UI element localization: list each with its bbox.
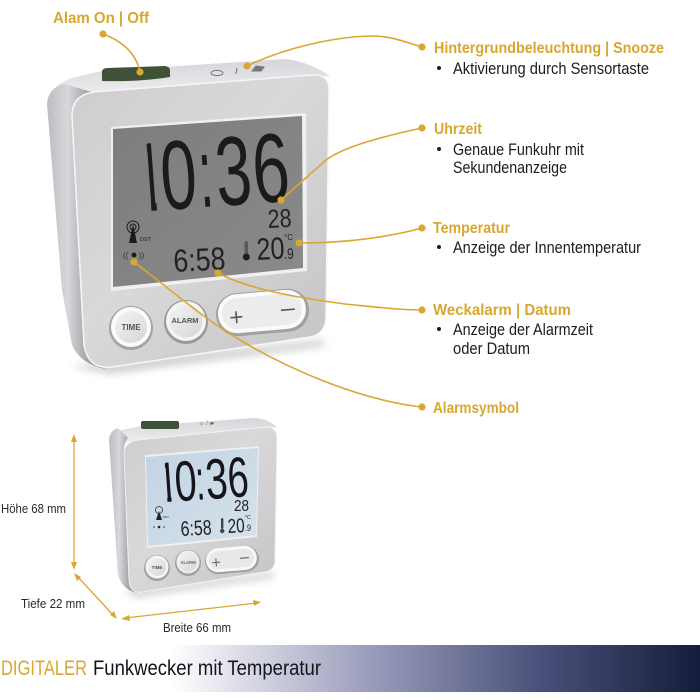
ALARM button: ALARM xyxy=(171,316,199,325)
plus minus button xyxy=(214,287,311,338)
time 10:36 xyxy=(146,134,288,211)
label: width: Breite 66 mm xyxy=(163,620,231,635)
clock side xyxy=(47,84,106,369)
callout line: alarm date xyxy=(214,269,426,314)
small LCD xyxy=(145,445,259,548)
large clock xyxy=(47,59,330,374)
block: temperature: Temperatur xyxy=(433,220,510,237)
small ALARM button xyxy=(175,550,201,576)
label: height: Höhe 68 mm xyxy=(1,501,66,516)
clock top surface xyxy=(52,59,330,95)
block: time: Sekundenanzeige xyxy=(453,159,567,177)
arrow: height xyxy=(71,434,77,570)
small clock side xyxy=(109,428,138,593)
block: temperature: Anzeige der Innentemperatur xyxy=(453,239,641,257)
alarm symbol: (( xyxy=(123,251,129,260)
footer band xyxy=(1,645,700,692)
thermometer icon xyxy=(243,241,250,260)
small alarm switch xyxy=(141,421,179,429)
small temperature: °C xyxy=(245,515,251,521)
small time: 1 xyxy=(155,450,180,516)
small time: : xyxy=(193,448,207,513)
callout line: alarm symbol xyxy=(130,258,426,411)
small thermometer xyxy=(220,518,224,533)
small TIME button: TIME xyxy=(152,565,162,570)
block: time: Uhrzeit xyxy=(434,121,482,138)
block: temperature xyxy=(433,220,641,257)
antenna icon DST xyxy=(127,221,152,243)
footer title: DIGITALER xyxy=(1,657,87,680)
callout line: temperature xyxy=(295,224,426,247)
TIME button xyxy=(109,306,153,350)
temperature 20.9: 20 xyxy=(256,231,285,267)
alarm switch xyxy=(102,66,170,81)
antenna icon DST: DST xyxy=(140,237,152,243)
footer title xyxy=(1,657,321,680)
small top icons: ☼ / ▰ xyxy=(199,421,214,427)
TIME button: TIME xyxy=(121,323,141,332)
callout line: backlight snooze xyxy=(243,36,426,70)
small alarm time: 6:58 xyxy=(180,516,212,541)
small seconds: 28 xyxy=(234,498,249,515)
time 10:36: 0 xyxy=(156,119,200,231)
block: alarm date: Weckalarm | Datum xyxy=(433,302,571,319)
arrow: depth xyxy=(74,573,117,619)
alarm symbol: )) xyxy=(139,251,145,260)
small clock top xyxy=(112,418,277,443)
block: alarm date xyxy=(433,302,593,358)
block: backlight snooze: Hintergrundbeleuchtung | Snooze xyxy=(434,40,664,57)
backlight and snooze icons xyxy=(211,66,264,76)
heading: alarm symbol: Alarmsymbol xyxy=(433,400,519,417)
callout line: alarm switch xyxy=(99,30,144,76)
arrow: width xyxy=(121,600,261,621)
alarm time 6:58: 6:58 xyxy=(172,240,226,279)
small temperature: 20 xyxy=(227,515,245,538)
block: alarm date: Anzeige der Alarmzeit xyxy=(453,321,593,339)
block: time xyxy=(434,121,584,177)
small time: 6 xyxy=(225,445,251,511)
block: backlight snooze: Aktivierung durch Sensortaste xyxy=(453,60,649,78)
footer title: Funkwecker mit Temperatur xyxy=(93,657,321,680)
time 10:36: 1 xyxy=(134,121,167,233)
LCD display xyxy=(111,112,307,291)
small TIME button xyxy=(144,555,170,581)
small time xyxy=(164,457,248,502)
alarm symbol xyxy=(123,251,145,260)
seconds 28: 28 xyxy=(267,203,292,234)
block: backlight snooze xyxy=(434,40,664,78)
small time: 3 xyxy=(203,447,230,512)
block: alarm date: oder Datum xyxy=(453,340,530,358)
time 10:36: 6 xyxy=(248,112,293,224)
clock front face xyxy=(72,75,329,367)
ALARM button xyxy=(164,300,208,344)
small time: 0 xyxy=(172,449,199,514)
small ALARM button: ALARM xyxy=(180,560,196,565)
small temperature: .9 xyxy=(245,523,251,533)
time 10:36: : xyxy=(194,117,216,228)
temperature 20.9: .9 xyxy=(283,245,294,263)
small clock xyxy=(109,418,277,598)
temperature 20.9: °C xyxy=(284,233,293,242)
callout line: time xyxy=(277,124,426,204)
small plus minus button xyxy=(204,545,260,575)
label: depth: Tiefe 22 mm xyxy=(21,596,85,611)
small antenna: DST xyxy=(163,515,169,519)
small clock front xyxy=(124,427,277,592)
time 10:36: 3 xyxy=(211,115,255,227)
heading: alarm on off: Alam On | Off xyxy=(53,10,150,27)
block: time: Genaue Funkuhr mit xyxy=(453,141,584,159)
